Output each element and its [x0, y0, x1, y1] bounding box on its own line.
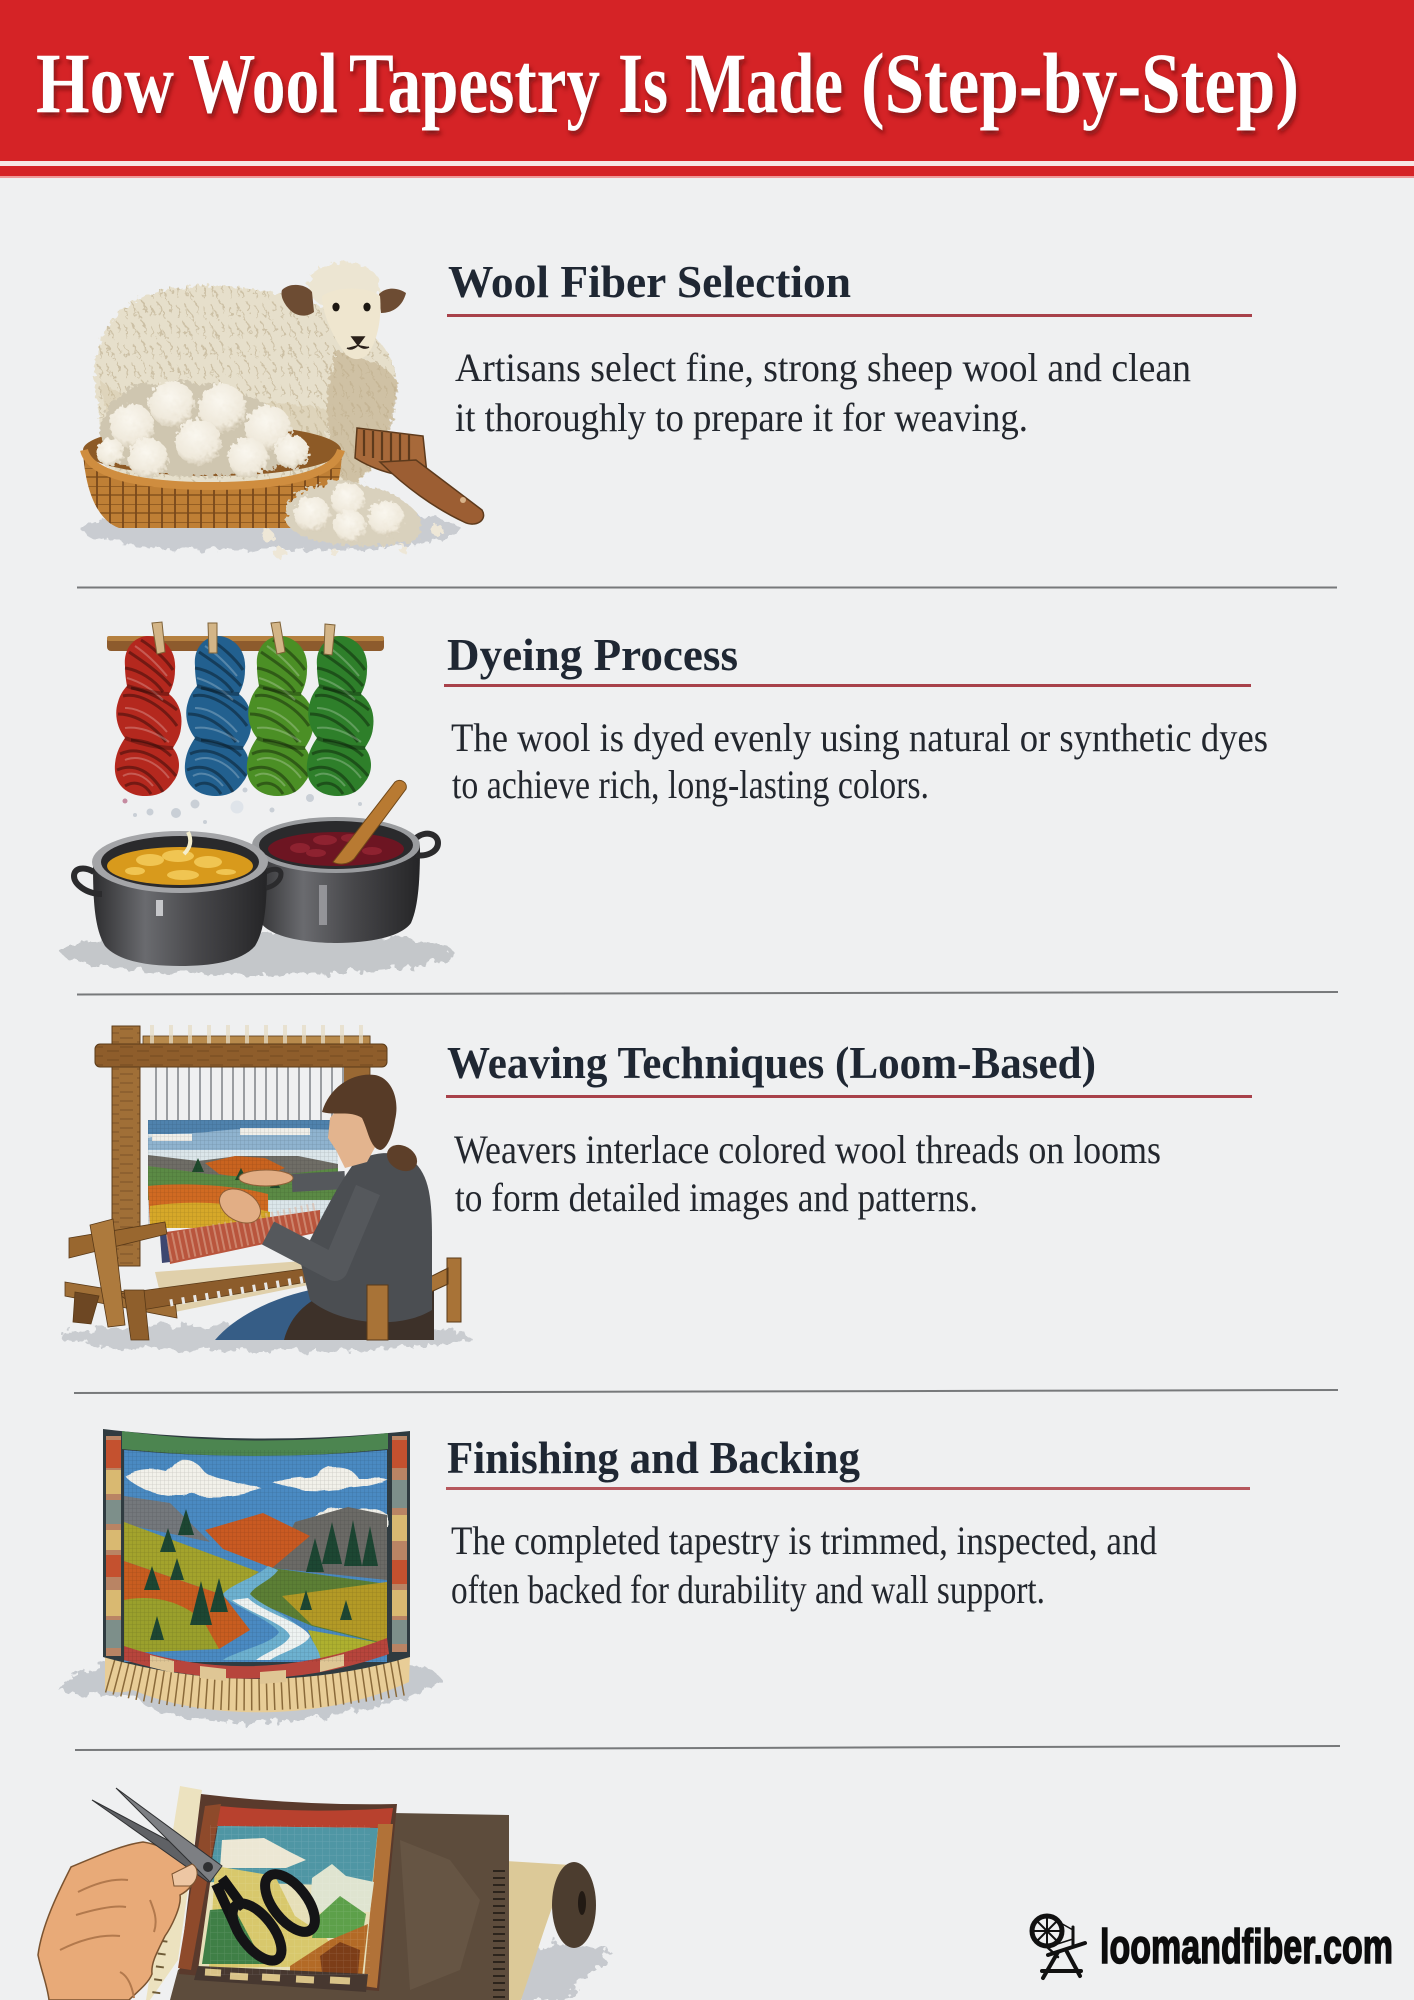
heading: finishing and backing: Finishing and Backing [447, 1433, 860, 1483]
panel: step 2 dyeing process [62, 622, 1268, 975]
title [36, 35, 1299, 131]
body text: The completed tapestry is trimmed, inspected, and [451, 1518, 1157, 1563]
illustration: sheep, wool basket and carding comb [82, 262, 484, 559]
heading: weaving techniques: Weaving Techniques (Loom-Based) [447, 1038, 1096, 1088]
body text [451, 715, 1268, 807]
illustration: finished landscape tapestry with fringe [58, 1429, 440, 1722]
body text: it thoroughly to prepare it for weaving. [455, 395, 1028, 440]
title: Tapestry [349, 35, 600, 131]
body text: Weavers interlace colored wool threads on looms [454, 1127, 1161, 1172]
body text: to achieve rich, long-lasting colors. [452, 762, 929, 807]
panel: step 1 wool fiber selection [82, 257, 1252, 559]
title: How [36, 35, 174, 131]
body text: to form detailed images and patterns. [455, 1175, 978, 1220]
panel: step 3 weaving techniques [60, 1026, 1252, 1351]
heading rule [446, 1487, 1250, 1490]
heading rule [447, 314, 1252, 317]
logo: spinning wheel icon and website [1032, 1916, 1393, 1978]
title: Made [685, 35, 843, 131]
title: (Step-by-Step) [861, 35, 1299, 131]
heading rule [446, 1095, 1252, 1098]
illustration: trimming tapestry with scissors and backing roll [38, 1786, 612, 2000]
panel: step 4 finishing and backing [58, 1429, 1250, 1722]
heading: dyeing process: Dyeing Process [447, 630, 738, 680]
body text: Artisans select fine, strong sheep wool and clean [455, 345, 1191, 390]
body text: often backed for durability and wall support. [451, 1567, 1045, 1612]
title: Wool [188, 35, 338, 131]
heading rule [444, 684, 1251, 687]
illustration: dyed yarn skeins and dye pots [62, 622, 454, 975]
body text: The wool is dyed evenly using natural or synthetic dyes [451, 715, 1268, 760]
icon: spinning wheel [1032, 1916, 1085, 1978]
heading: wool fiber selection: Wool Fiber Selection [448, 257, 851, 307]
title: Is [618, 35, 668, 131]
body text [455, 345, 1191, 440]
body text [451, 1518, 1157, 1612]
illustration: weaver at a wooden loom [60, 1026, 470, 1351]
body text [454, 1127, 1161, 1220]
header banner [0, 0, 1414, 178]
